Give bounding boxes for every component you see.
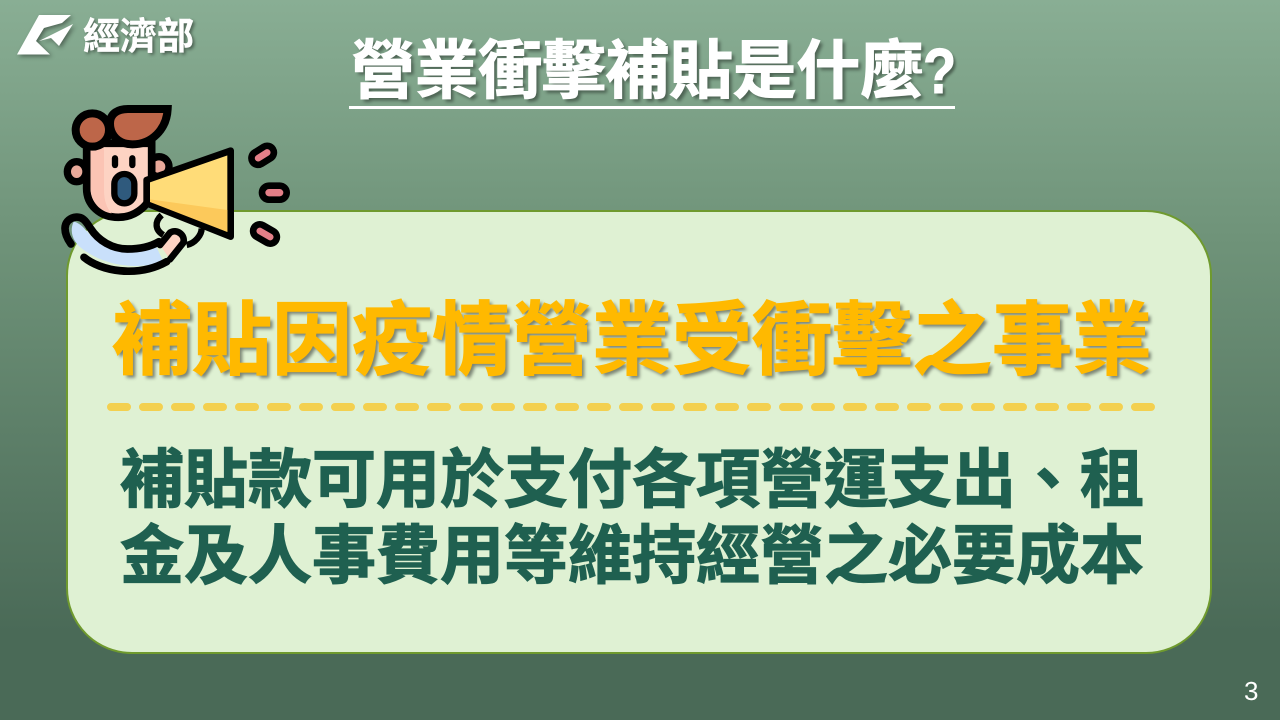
page number: 3 [1244,676,1258,706]
person [65,109,202,271]
panel: subsidy explanation [66,210,1212,654]
dashed divider [107,403,1155,411]
icon: person shouting into megaphone [61,105,290,275]
megaphone handle [157,215,202,245]
body text [120,429,1144,592]
megaphone cone [147,151,231,237]
hair [76,109,168,147]
body text: 補貼款可用於支付各項營運支出、租 [120,429,1144,521]
title: ? [923,35,956,107]
face [87,143,152,217]
logo: ministry mark and name [17,14,196,59]
logo text: 經濟部 [83,16,194,57]
eyes [115,158,132,165]
icon: ministry logo mark [17,14,76,59]
right ear [149,157,169,177]
mouth [114,174,134,203]
headline: 補貼因疫情營業受衝擊之事業 [112,296,1152,385]
sound marks [249,143,287,246]
title: 營業衝擊補貼是什麼 [351,35,923,107]
hand [160,231,184,259]
arm [72,222,163,266]
body text: 金及人事費用等維持經營之必要成本 [120,520,1144,592]
left ear [67,162,86,182]
